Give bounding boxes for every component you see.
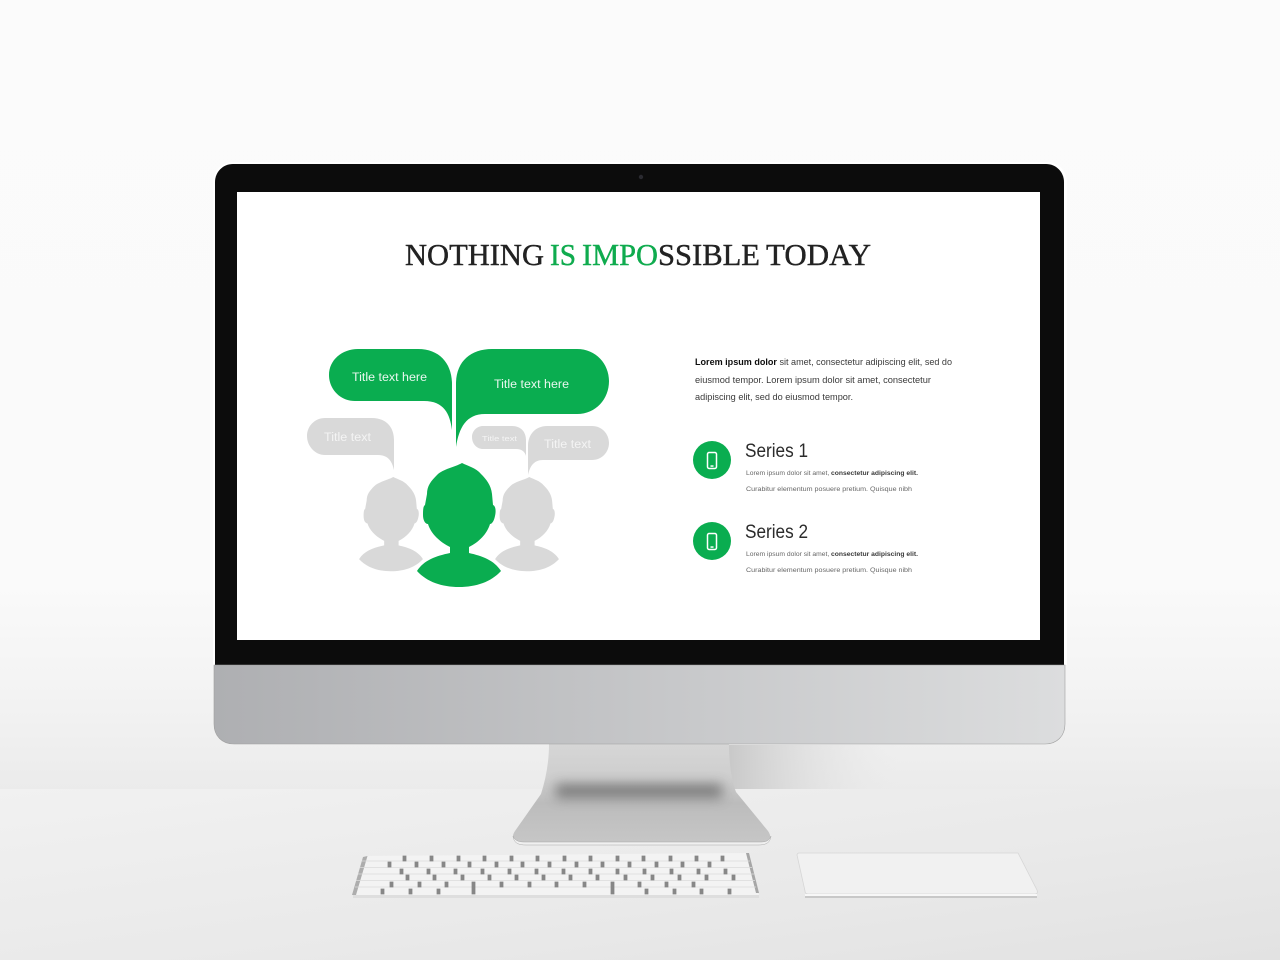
monitor black bezel bbox=[215, 164, 1064, 665]
series 1 item bbox=[693, 441, 918, 493]
slide screen bbox=[237, 192, 1040, 640]
speech bubble: gray right: Title text bbox=[544, 439, 592, 451]
speech bubble: gray small: Title text bbox=[482, 434, 518, 443]
speech bubble: gray left bbox=[307, 418, 394, 470]
monitor aluminium chin bbox=[214, 665, 1065, 744]
series 1 heading: Series 1 bbox=[745, 441, 808, 462]
monitor stand bbox=[513, 744, 771, 845]
person: gray left bbox=[359, 477, 423, 571]
intro paragraph: adipiscing elit, sed do eiusmod tempor. bbox=[695, 391, 853, 402]
title: SSIBLE bbox=[658, 237, 760, 272]
series 2 text: Lorem ipsum dolor sit amet, consectetur adipiscing elit. bbox=[746, 551, 918, 558]
intro paragraph bbox=[695, 356, 952, 402]
series 2 heading: Series 2 bbox=[745, 522, 808, 543]
series 2 item bbox=[693, 522, 918, 574]
speech bubble: green right bbox=[456, 349, 609, 447]
monitor outer highlight bbox=[213, 162, 1067, 665]
series 1 text bbox=[746, 470, 918, 493]
intro paragraph: Lorem ipsum dolor sit amet, consectetur adipiscing elit, sed do bbox=[695, 356, 952, 367]
title bbox=[405, 237, 871, 272]
title: NOTHING bbox=[405, 237, 544, 272]
title: IS bbox=[550, 237, 576, 272]
speech bubble: green left: Title text here bbox=[352, 370, 427, 384]
stand shadow on wall bbox=[728, 745, 898, 789]
desk surface bbox=[0, 789, 1280, 960]
series 2 text: Curabitur elementum posuere pretium. Quisque nibh bbox=[746, 567, 912, 574]
icon: phone in green circle bbox=[693, 522, 731, 560]
person: gray right bbox=[495, 477, 559, 571]
series 1 text: Curabitur elementum posuere pretium. Quisque nibh bbox=[746, 486, 912, 493]
speech bubble: gray left: Title text bbox=[324, 432, 372, 444]
title: TODAY bbox=[766, 237, 871, 272]
monitor bbox=[213, 162, 1067, 744]
speech bubble: green right: Title text here bbox=[494, 377, 569, 391]
person: green centre bbox=[417, 463, 501, 587]
series 2 text bbox=[746, 551, 918, 574]
icon: phone in green circle bbox=[693, 441, 731, 479]
keyboard bbox=[352, 853, 759, 898]
title: IMPO bbox=[582, 237, 658, 272]
intro paragraph: eiusmod tempor. Lorem ipsum dolor sit amet, consectetur bbox=[695, 374, 931, 385]
webcam bbox=[639, 175, 643, 179]
trackpad bbox=[797, 853, 1037, 898]
speech bubble: green left bbox=[329, 349, 452, 430]
speech bubble: gray right bbox=[528, 426, 609, 475]
speech bubble: gray small bbox=[472, 426, 526, 456]
series 1 text: Lorem ipsum dolor sit amet, consectetur adipiscing elit. bbox=[746, 470, 918, 477]
